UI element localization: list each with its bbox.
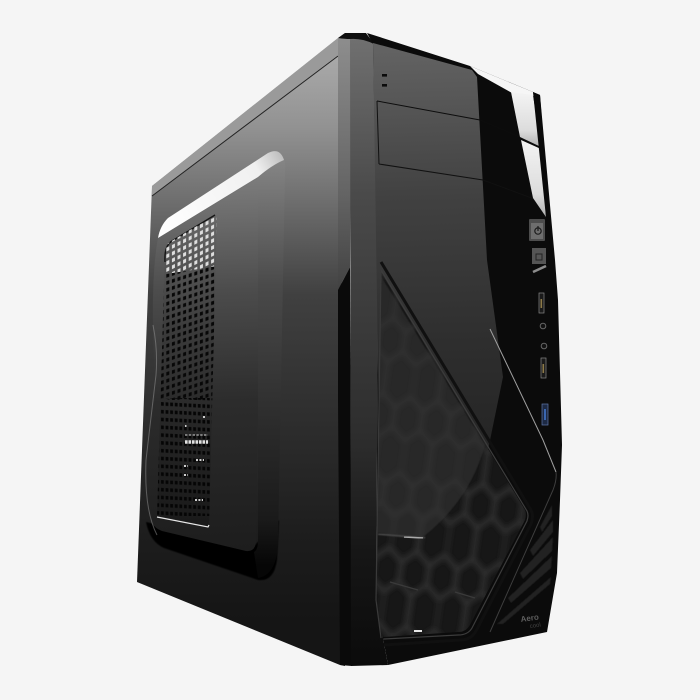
icon: front indicator LEDs xyxy=(382,74,387,87)
lower right vent slashes xyxy=(497,505,553,624)
case: front corner bevel xyxy=(338,33,388,666)
front I/O ports xyxy=(539,293,548,425)
case: front panel xyxy=(367,33,562,665)
bevel inner column xyxy=(350,38,388,666)
bevel black reflection xyxy=(338,267,352,666)
bevel outer column xyxy=(338,33,352,290)
brand logo: Aero xyxy=(520,613,539,624)
white highlight on panel edge xyxy=(158,151,284,238)
port: audio jack 2 xyxy=(541,343,547,349)
port: USB 2.0 lower xyxy=(541,358,546,378)
gloss reflection: top right xyxy=(470,66,552,258)
reflection over window xyxy=(377,270,485,537)
ventilation grille xyxy=(155,205,220,527)
port: USB 2.0 top xyxy=(539,293,544,313)
raised panel right strip xyxy=(254,158,285,578)
port: audio jack 1 xyxy=(540,323,546,329)
drive bay seams xyxy=(377,101,545,203)
bevel black cap xyxy=(338,33,374,44)
recessed panel shadow xyxy=(146,520,279,580)
brand logo: cool xyxy=(529,623,541,630)
brand logo xyxy=(520,613,541,630)
matte grey face xyxy=(373,43,503,565)
illustration: PC tower case xyxy=(137,33,562,666)
top edge with seam xyxy=(152,38,338,196)
window double frame xyxy=(381,270,528,639)
port: USB 3.0 blue xyxy=(542,404,548,425)
reset button xyxy=(532,248,546,272)
case: side face xyxy=(137,38,345,666)
thin white contour line xyxy=(490,329,556,632)
raised side panel xyxy=(146,158,285,578)
window: mesh with honeycomb xyxy=(370,262,535,645)
power button xyxy=(529,219,545,241)
